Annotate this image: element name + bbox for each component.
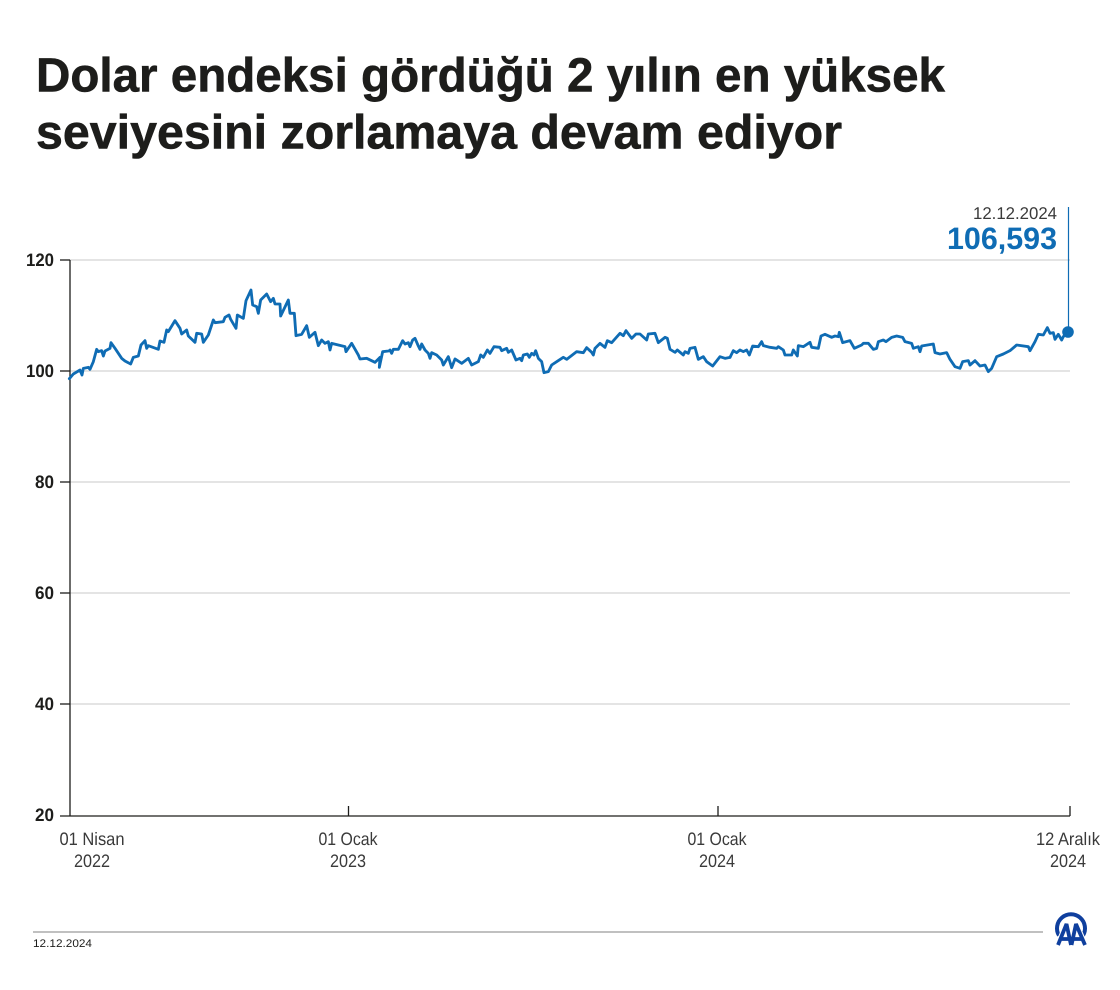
x axis labels: 2023: [330, 851, 366, 871]
x axis labels: 01 Nisan: [60, 829, 124, 849]
x axis labels: 01 Ocak: [318, 829, 378, 849]
grid lines: [70, 260, 1070, 704]
x axis labels: 2024: [699, 851, 735, 871]
y axis labels: 40: [35, 694, 54, 714]
callout: latest value: [947, 204, 1074, 338]
y axis labels: 60: [35, 583, 54, 603]
y axis labels: [26, 250, 54, 825]
x axis labels: 12 Aralık: [1036, 829, 1101, 849]
y axis labels: 120: [26, 250, 54, 270]
footer date: 12.12.2024: [33, 938, 92, 950]
title: seviyesini zorlamaya devam ediyor: [36, 106, 842, 160]
y axis labels: 100: [26, 361, 54, 381]
y axis labels: 20: [35, 805, 54, 825]
x axis labels: 2022: [74, 851, 110, 871]
y axis labels: 80: [35, 472, 54, 492]
x axis labels: 01 Ocak: [688, 829, 747, 849]
callout: latest value: 106,593: [947, 221, 1057, 256]
footer rule: [33, 931, 1043, 933]
title: [36, 50, 945, 160]
x axis labels: [60, 829, 1101, 871]
line chart: dollar index: [69, 290, 1068, 379]
icon: AA logo: [1057, 914, 1085, 945]
title: Dolar endeksi gördüğü 2 yılın en yüksek: [36, 50, 945, 102]
axes and ticks: [60, 260, 1070, 816]
callout: latest value: 12.12.2024: [973, 204, 1057, 223]
x axis labels: 2024: [1050, 851, 1086, 871]
